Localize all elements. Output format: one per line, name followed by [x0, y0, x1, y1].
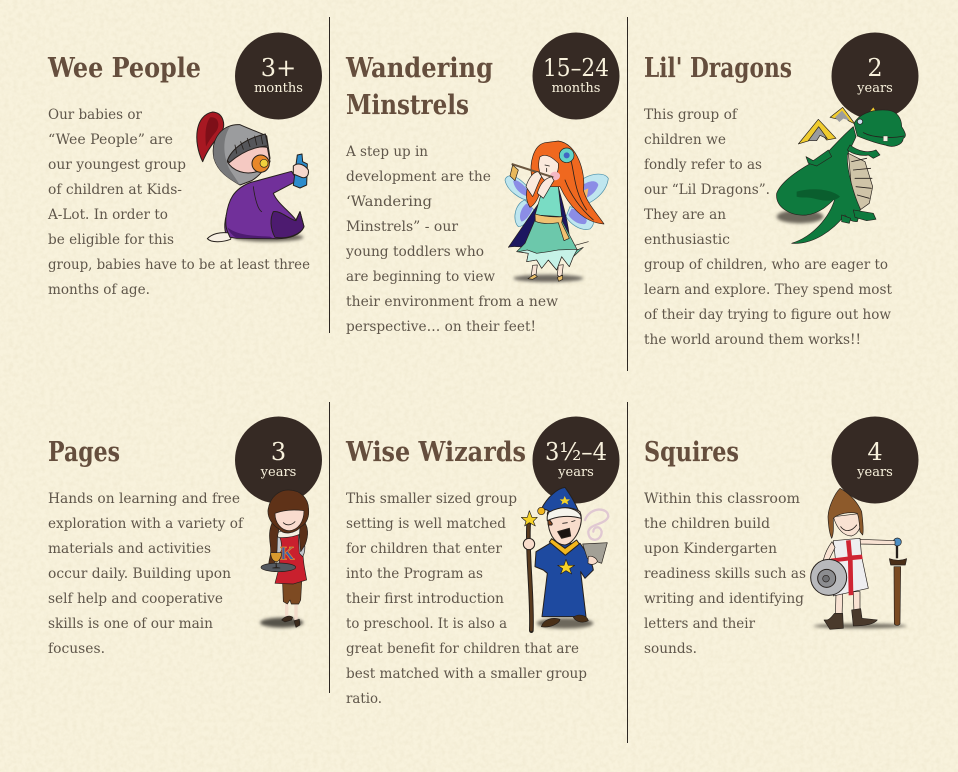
text block: Squires description: Within this classroom [644, 491, 800, 507]
icon: page girl with tray [260, 490, 309, 628]
text block: Wandering Minstrels description: their environment from a new [346, 294, 558, 310]
icon: fairy with flute [505, 141, 608, 282]
text block: Squires description [644, 491, 806, 657]
icon: squire with shield and sword [811, 488, 907, 629]
age badge: 15–24 months: 15–24 [543, 54, 609, 82]
age badge: 3+ months: months [254, 81, 303, 96]
text block: Wandering Minstrels description: development are the [346, 169, 491, 185]
text block: Pages description: exploration with a variety of [48, 516, 244, 532]
text block: Wise Wizards description: their first introduction [346, 591, 504, 607]
age badge: 2 years: 2 [867, 54, 883, 82]
heading: Squires: Squires [644, 437, 739, 468]
panel: Squires [644, 416, 918, 657]
text block: Wee People description: be eligible for this [48, 232, 174, 248]
text block: Wee People description: Our babies or [48, 107, 143, 123]
text block: Pages description: focuses. [48, 641, 105, 657]
text block: Pages description: occur daily. Building upon [48, 566, 231, 582]
text block: Lil' Dragons description: This group of [644, 107, 738, 123]
icon: wizard with staff and book [521, 487, 608, 631]
text block: Lil' Dragons description: of their day trying to figure out how [644, 307, 891, 323]
panel: Lil' Dragons [644, 32, 918, 348]
text block: Squires description: the children build [644, 516, 770, 532]
text block: Lil' Dragons description: our “Lil Dragons”. [644, 182, 770, 198]
text block: Wandering Minstrels description: young toddlers who [345, 244, 484, 260]
text block: Lil' Dragons description [644, 107, 893, 348]
panel: Pages [48, 416, 322, 657]
text block: Wee People description: group, babies have to be at least three [48, 257, 310, 273]
text block: Wise Wizards description: ratio. [346, 691, 382, 707]
icon: green dragon [777, 107, 905, 243]
text block: Wee People description: A-Lot. In order to [47, 207, 168, 223]
panel: Wise Wizards [345, 416, 620, 707]
text block: Wandering Minstrels description: Minstrels” - our [346, 219, 459, 235]
panel: Wandering Minstrels [345, 32, 620, 335]
text block: Wee People description [47, 107, 310, 298]
age badge: 4 years: 4 [867, 438, 883, 466]
text block: Lil' Dragons description: group of children, who are eager to [644, 257, 888, 273]
text block: Wise Wizards description: into the Program as [346, 566, 483, 582]
text block: Wee People description: “Wee People” are [48, 132, 173, 148]
age badge: 2 years: years [856, 81, 893, 96]
text block: Squires description: writing and identifying [644, 591, 804, 607]
age badge: 4 years: years [856, 465, 893, 480]
text block: Wise Wizards description: great benefit for children that are [346, 641, 579, 657]
icon: page girl with tray: K [280, 543, 295, 564]
text block: Squires description: upon Kindergarten [644, 541, 777, 557]
heading: Wee People: Wee People [47, 53, 201, 84]
text block: Wise Wizards description: best matched with a smaller group [346, 666, 587, 682]
age badge: 2 years [832, 32, 918, 120]
heading: Wandering Minstrels [345, 53, 493, 121]
text block: Pages description: skills is one of our main [48, 616, 213, 632]
age badge: 3+ months [235, 32, 322, 120]
age badge: 3 years [235, 416, 322, 504]
text block: Lil' Dragons description: learn and explore. They spend most [644, 282, 893, 298]
text block: Lil' Dragons description: fondly refer to as [644, 157, 762, 173]
text block: Squires description: readiness skills such as [644, 566, 806, 582]
text block: Wee People description: months of age. [48, 282, 150, 298]
age badge: 3 years: years [260, 465, 296, 480]
panel: Wee People [47, 32, 322, 298]
text block: Lil' Dragons description: enthusiastic [644, 232, 730, 248]
text block: Wise Wizards description: for children that enter [346, 541, 503, 557]
age badge: 4 years [832, 416, 918, 504]
text block: Wee People description: our youngest group [48, 157, 186, 173]
age badge: 15–24 months [532, 32, 620, 120]
text block: Lil' Dragons description: the world around them works!! [644, 332, 861, 348]
text block: Pages description: Hands on learning and free [48, 491, 240, 507]
icon: baby knight [197, 112, 308, 242]
text block: Wandering Minstrels description [345, 144, 558, 335]
age badge: 3½–4 years [532, 416, 620, 504]
text block: Wee People description: of children at Kids- [48, 182, 182, 198]
text block: Wandering Minstrels description: perspective… on their feet! [346, 319, 536, 335]
text block: Pages description: self help and cooperative [48, 591, 223, 607]
text block: Wise Wizards description: setting is well matched [346, 516, 506, 532]
heading: Wise Wizards: Wise Wizards [345, 437, 526, 468]
text block: Wandering Minstrels description: A step up in [345, 144, 428, 160]
heading: Pages: Pages [48, 437, 120, 468]
age badge: 3½–4 years: 3½–4 [545, 438, 607, 466]
text block: Squires description: sounds. [644, 641, 697, 657]
heading: Wandering Minstrels: Wandering [345, 53, 493, 84]
text block: Lil' Dragons description: children we [644, 132, 726, 148]
text block: Pages description: materials and activities [48, 541, 211, 557]
heading: Lil' Dragons: Lil' Dragons [644, 53, 792, 84]
text block: Wandering Minstrels description: are beginning to view [346, 269, 495, 285]
text block: Wandering Minstrels description: ‘Wandering [346, 194, 432, 210]
text block: Pages description [48, 491, 244, 657]
text block: Wise Wizards description: to preschool. It is also a [346, 616, 507, 632]
age badge: 15–24 months: months [552, 81, 600, 96]
age badge: 3½–4 years: years [557, 465, 594, 480]
text block: Wise Wizards description [346, 491, 587, 707]
text block: Squires description: letters and their [644, 616, 756, 632]
age badge: 3 years: 3 [271, 438, 286, 466]
heading: Wandering Minstrels: Minstrels [346, 90, 469, 121]
text block: Wise Wizards description: This smaller sized group [346, 491, 517, 507]
age badge: 3+ months: 3+ [261, 54, 296, 82]
text block: Lil' Dragons description: They are an [644, 207, 726, 223]
